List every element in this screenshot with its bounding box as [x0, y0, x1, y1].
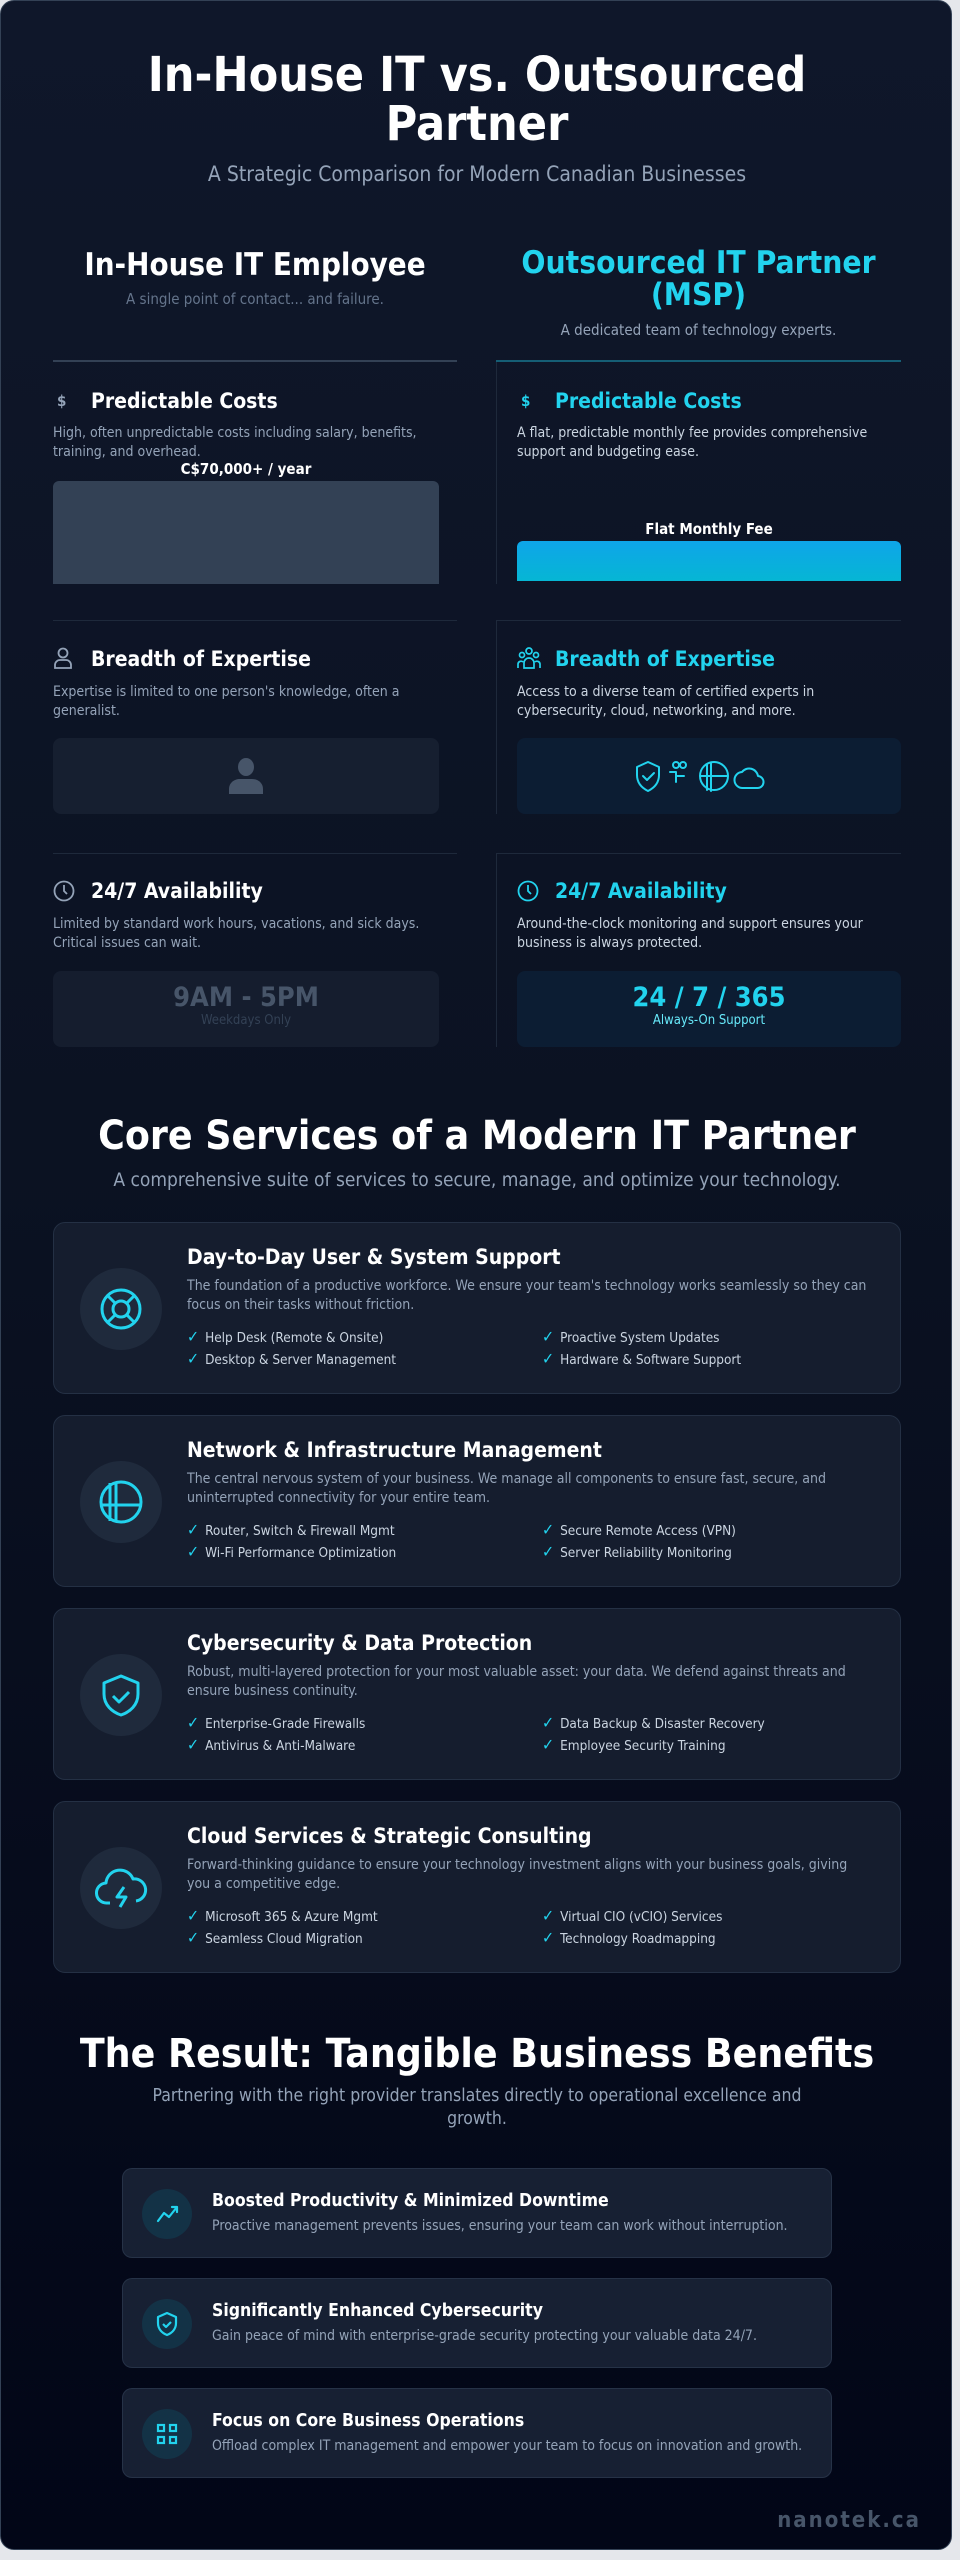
panel: service cloud [53, 1801, 901, 1973]
benefit: security [122, 2278, 832, 2368]
subheading: results: Partnering with the right provider translates directly to operational excellence and [152, 2086, 802, 2106]
stat box: 9-5 [53, 971, 439, 1047]
heading: 24/7 Availability [91, 879, 263, 903]
heading: Predictable Costs [91, 389, 278, 413]
panel: in-house availability [53, 879, 439, 1047]
title: Cloud Services & Strategic Consulting [187, 1824, 592, 1848]
panel: service network: ✓ Secure Remote Access (VPN) [542, 1520, 736, 1539]
benefit: focus [122, 2388, 832, 2478]
text: A flat, predictable monthly fee provides comprehensive support and budgeting ease. [517, 425, 867, 460]
panel: outsourced expertise [517, 647, 901, 814]
stat box: 9-5: 9AM - 5PM [173, 982, 319, 1013]
icon box: expert icons [517, 738, 901, 814]
bar chart: flat fee: Flat Monthly Fee [645, 520, 773, 538]
column heading: outsourced: (MSP) [651, 277, 746, 313]
icon: grid [142, 2409, 192, 2459]
title: In-House IT vs. Outsourced [148, 47, 806, 103]
text: The foundation of a productive workforce. We ensure your team's technology works seamlessly so they can focus on their tasks without friction. [187, 1278, 866, 1313]
panel: service security: ✓ Data Backup & Disaster Recovery [542, 1713, 765, 1732]
title: Day-to-Day User & System Support [187, 1245, 561, 1269]
panel: service support: ✓ Proactive System Updates [542, 1327, 720, 1346]
icon: shield [142, 2299, 192, 2349]
benefit: security: Gain peace of mind with enterprise-grade security protecting your valuable data 24/7. [212, 2328, 757, 2344]
panel: service security: ✓ Employee Security Training [542, 1735, 726, 1754]
stat box: 9-5: Weekdays Only [201, 1013, 291, 1028]
text: The central nervous system of your business. We manage all components to ensure fast, secure, and uninterrupted connectivity for your entire team. [187, 1471, 826, 1506]
bar chart: flat fee [517, 520, 901, 581]
column heading: in-house [84, 247, 426, 308]
column heading: in-house: A single point of contact... and failure. [126, 290, 384, 308]
benefit: security: Significantly Enhanced Cybersecurity [212, 2301, 543, 2321]
subtitle: A Strategic Comparison for Modern Canadian Businesses [208, 162, 746, 186]
column heading: outsourced [521, 245, 876, 339]
panel: service network [53, 1415, 901, 1587]
benefit: focus: Offload complex IT management and empower your team to focus on innovation and growth. [212, 2438, 802, 2454]
checklist: ✓ Microsoft 365 & Azure Mgmt [187, 1906, 378, 1925]
stat box: 24/7/365: Always-On Support [653, 1013, 765, 1028]
title: Cybersecurity & Data Protection [187, 1631, 532, 1655]
panel: service security: ✓ Antivirus & Anti-Malware [187, 1735, 355, 1754]
benefit: productivity: Proactive management prevents issues, ensuring your team can work without interruption. [212, 2218, 788, 2234]
checklist: ✓ Enterprise-Grade Firewalls [187, 1713, 365, 1732]
text: Around-the-clock monitoring and support ensures your business is always protected. [517, 916, 863, 951]
panel: outsourced availability [517, 879, 901, 1047]
text: High, often unpredictable costs including salary, benefits, training, and overhead. [53, 425, 417, 460]
title: Partner [386, 96, 568, 152]
benefit: productivity: Boosted Productivity & Minimized Downtime [212, 2191, 609, 2211]
heading: core services: Core Services of a Modern IT Partner [98, 1111, 856, 1159]
heading: $ [57, 392, 66, 410]
panel: in-house costs [53, 389, 439, 584]
text: Expertise is limited to one person's knowledge, often a generalist. [53, 684, 399, 719]
footer: brand: nanotek.ca [777, 2508, 921, 2533]
panel: service network: ✓ Server Reliability Monitoring [542, 1542, 732, 1561]
heading: Breadth of Expertise [91, 647, 311, 671]
icon: lifebuoy [80, 1268, 162, 1350]
text: Access to a diverse team of certified experts in cybersecurity, cloud, networking, and more. [517, 684, 814, 719]
stat box: 24/7/365 [517, 971, 901, 1047]
stat box: 24/7/365: 24 / 7 / 365 [633, 982, 785, 1013]
benefit: productivity [122, 2168, 832, 2258]
icon: shield [80, 1654, 162, 1736]
panel: service network: ✓ Wi-Fi Performance Optimization [187, 1542, 396, 1561]
panel: service security [53, 1608, 901, 1780]
bar chart: in-house cost [53, 460, 439, 584]
subheading: results: growth. [447, 2109, 507, 2129]
icon: network [80, 1461, 162, 1543]
text: Robust, multi-layered protection for your most valuable asset: your data. We defend against threats and ensure business continuity. [187, 1664, 846, 1699]
panel: service cloud: ✓ Seamless Cloud Migration [187, 1928, 363, 1947]
panel: in-house expertise [53, 647, 439, 814]
column heading: in-house: In-House IT Employee [84, 247, 426, 283]
heading: $ [521, 392, 530, 410]
benefit: focus: Focus on Core Business Operations [212, 2411, 524, 2431]
text [187, 1857, 847, 1892]
bar chart: in-house cost: C$70,000+ / year [181, 460, 311, 478]
panel: outsourced costs [517, 389, 901, 581]
panel: service support: ✓ Desktop & Server Management [187, 1349, 396, 1368]
panel: service support: ✓ Hardware & Software Support [542, 1349, 741, 1368]
panel: service cloud: ✓ Virtual CIO (vCIO) Services [542, 1906, 722, 1925]
column heading: outsourced: A dedicated team of technology experts. [561, 321, 836, 339]
heading: 24/7 Availability [555, 879, 727, 903]
panel: service cloud: ✓ Technology Roadmapping [542, 1928, 716, 1947]
text: Limited by standard work hours, vacations, and sick days. Critical issues can wait. [53, 916, 419, 951]
text: Forward-thinking guidance to ensure your technology investment aligns with your business goals, giving [187, 1857, 847, 1873]
title: Network & Infrastructure Management [187, 1438, 602, 1462]
icon box: single person [53, 738, 439, 814]
heading: Breadth of Expertise [555, 647, 775, 671]
heading: results: The Result: Tangible Business Benefits [80, 2029, 874, 2077]
subheading: results [152, 2086, 802, 2129]
icon: cloud [80, 1847, 162, 1929]
panel: service support [53, 1222, 901, 1394]
column heading: outsourced: Outsourced IT Partner [521, 245, 876, 281]
title [148, 47, 806, 152]
subheading: core services: A comprehensive suite of services to secure, manage, and optimize your technology. [113, 1169, 841, 1191]
heading: Predictable Costs [555, 389, 742, 413]
checklist: ✓ Help Desk (Remote & Onsite) [187, 1327, 383, 1346]
icon: trend [142, 2189, 192, 2239]
text: you a competitive edge. [187, 1876, 340, 1892]
checklist: ✓ Router, Switch & Firewall Mgmt [187, 1520, 395, 1539]
